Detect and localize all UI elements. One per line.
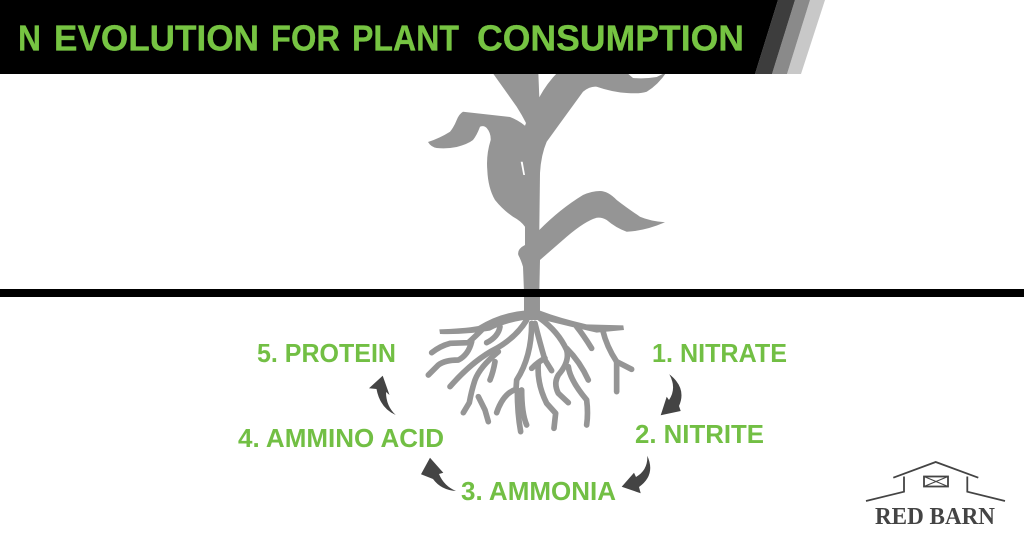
arrow: ammino acid to protein	[369, 376, 396, 415]
plant roots	[428, 293, 632, 432]
label: 3. Ammonia: 3. AMMONIA	[461, 476, 616, 506]
label: 1. Nitrate: 1. NITRATE	[652, 338, 787, 368]
logo barn outline	[866, 462, 1005, 501]
title: EVOLUTION	[54, 18, 259, 58]
arrow: nitrate to nitrite	[661, 374, 681, 415]
title: N	[18, 18, 41, 58]
title: FOR	[271, 18, 340, 58]
header banner	[0, 0, 825, 74]
title	[18, 18, 744, 58]
label: 5. Protein: 5. PROTEIN	[257, 338, 396, 368]
banner background	[0, 0, 778, 74]
logo wordmark: RED BARN	[875, 504, 996, 530]
logo: Red Barn	[866, 462, 1005, 530]
arrow: ammonia to ammino acid	[421, 458, 456, 491]
title: PLANT	[352, 18, 459, 58]
banner stripes	[755, 0, 825, 74]
label: 2. Nitrite: 2. NITRITE	[635, 419, 764, 449]
title: CONSUMPTION	[477, 18, 744, 58]
label: 4. Ammino Acid: 4. AMMINO ACID	[238, 423, 444, 453]
plant stem and leaves	[428, 72, 667, 292]
arrow: nitrite to ammonia	[622, 456, 650, 493]
ground line	[0, 289, 1024, 297]
